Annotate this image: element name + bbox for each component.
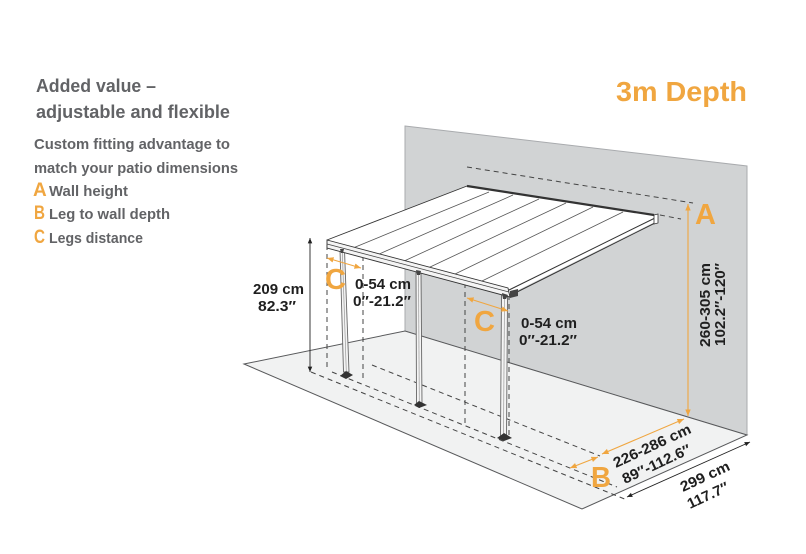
arrow: right C	[467, 298, 508, 311]
dimension: depth	[611, 422, 694, 488]
text block: custom fitting and legend: match your patio dimensions	[34, 160, 238, 177]
heading: added value: Added value –	[36, 76, 156, 96]
dimension: 209 cm: 82.3″	[258, 299, 296, 315]
dimension: right offset: 0″-21.2″	[519, 333, 577, 349]
label A: A	[695, 199, 716, 231]
title: 3m depth: 3m Depth	[616, 76, 747, 107]
dimension: depth: 226-286 cm	[611, 422, 694, 472]
heading: added value	[36, 76, 230, 122]
arrow: left C	[327, 258, 361, 268]
text block: custom fitting and legend: B	[34, 203, 45, 224]
front beam	[327, 240, 510, 297]
dimension: 299 cm	[678, 459, 733, 513]
dimension: left offset: 0″-21.2″	[353, 294, 411, 310]
text block: custom fitting and legend: Wall height	[49, 183, 128, 200]
wall	[405, 126, 747, 435]
leg 3	[497, 295, 512, 441]
arrow: overall depth	[627, 442, 750, 497]
dimension: wall height: 260-305 cm	[698, 263, 714, 347]
dimension: right offset	[519, 316, 577, 349]
dimension: 299 cm: 299 cm	[678, 459, 733, 496]
pergola	[327, 186, 658, 441]
text block: custom fitting and legend: Custom fitting advantage to	[34, 136, 230, 153]
label B: B	[591, 462, 611, 494]
dimension: depth: 89″-112.6″	[620, 442, 694, 488]
dimension: left offset	[353, 277, 411, 310]
arrows: depth B	[570, 419, 684, 468]
dashed guide lines	[311, 167, 693, 500]
dimension: 299 cm: 117.7″	[685, 480, 732, 513]
text block: custom fitting and legend: Legs distance	[49, 230, 143, 247]
dimension: 209 cm	[253, 282, 304, 315]
heading: added value: adjustable and flexible	[36, 102, 230, 122]
text block: custom fitting and legend	[33, 136, 238, 248]
dimension: left offset: 0-54 cm	[355, 277, 411, 293]
label: right C: C	[474, 306, 495, 338]
text block: custom fitting and legend: Leg to wall depth	[49, 206, 170, 223]
roof	[327, 186, 658, 299]
leg 2	[414, 272, 427, 408]
dimension: wall height	[698, 263, 729, 347]
leg 1	[340, 250, 353, 379]
dimension: wall height: 102.2″-120″	[713, 263, 729, 346]
dimension: 209 cm: 209 cm	[253, 282, 304, 298]
dimension: right offset: 0-54 cm	[521, 316, 577, 332]
text block: custom fitting and legend: C	[34, 227, 45, 248]
label: left C: C	[325, 264, 346, 296]
arrow: wall height A	[687, 204, 689, 416]
text block: custom fitting and legend: A	[33, 180, 47, 201]
arrow: leg height	[309, 238, 311, 372]
floor	[244, 331, 747, 509]
